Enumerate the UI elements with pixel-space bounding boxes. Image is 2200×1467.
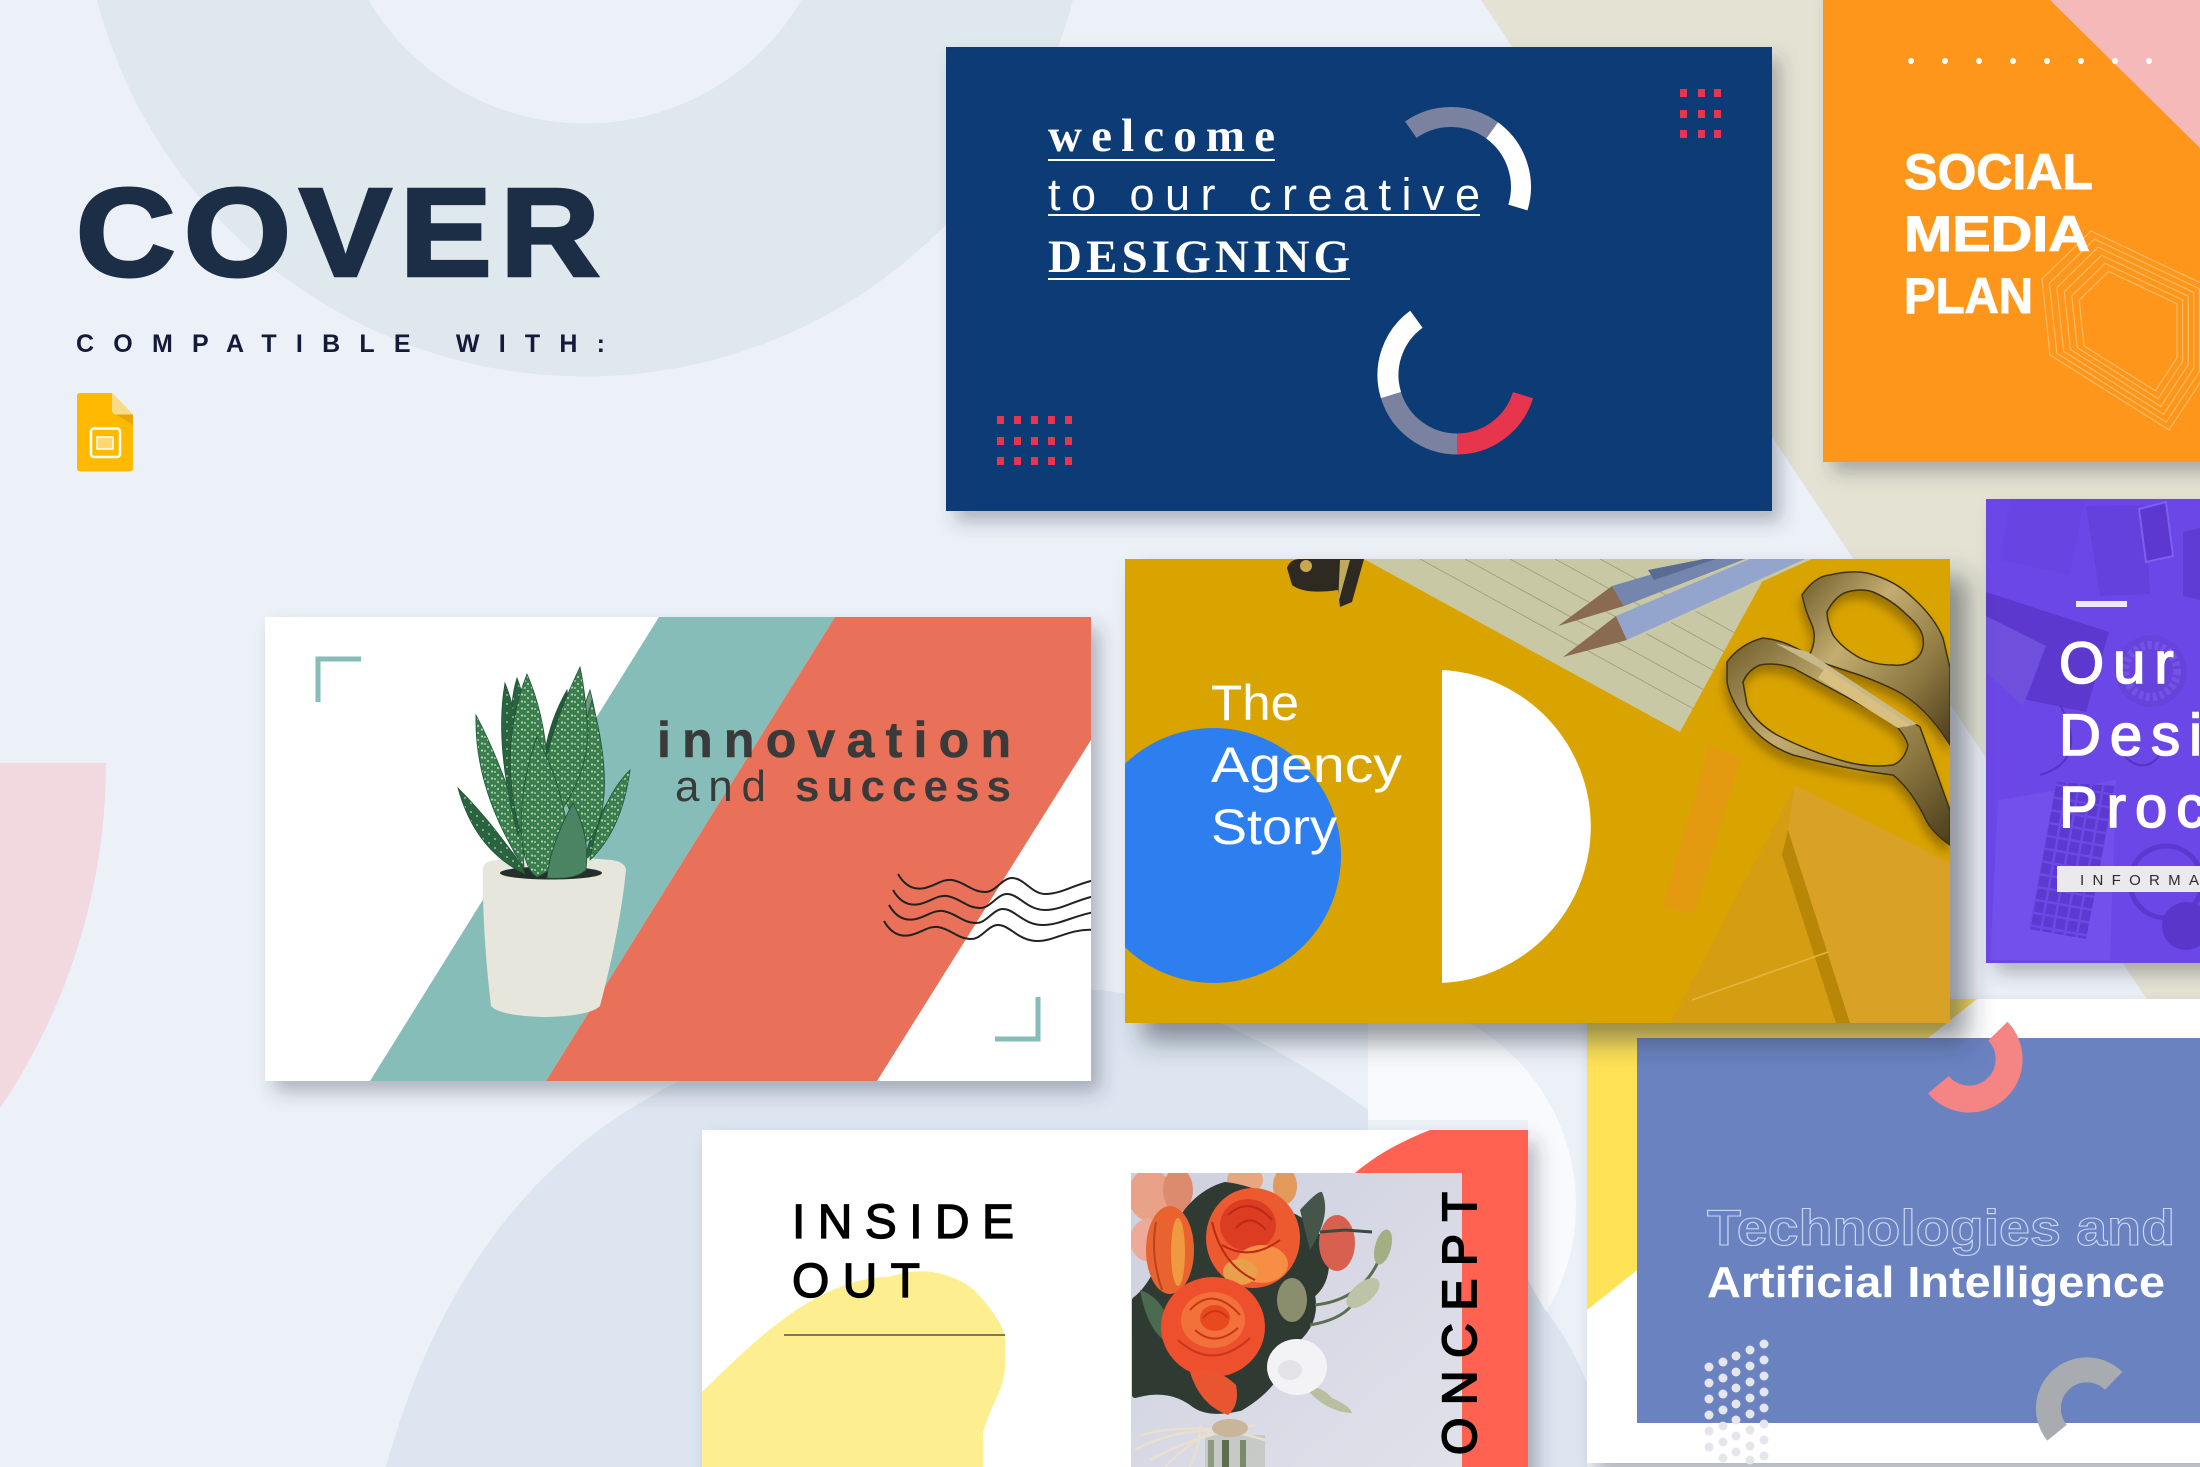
tulip right <box>1319 1215 1355 1271</box>
title: innovation and success: innovation <box>657 712 1011 768</box>
photo: lined paper <box>1364 559 1772 732</box>
nested hexagon lines <box>2042 231 2200 430</box>
lower petal <box>1190 1370 1237 1415</box>
heading: technologies and artificial intelligence: Technologies and <box>1707 1200 2175 1256</box>
corner bracket bottom right <box>995 997 1038 1039</box>
heading: social media plan <box>1904 144 2093 324</box>
grey arc <box>2048 1370 2114 1433</box>
ring: upper arc <box>1411 117 1521 208</box>
heading: the agency story: Agency <box>1211 737 1402 793</box>
heading: the agency story <box>1211 675 1402 855</box>
leaves <box>458 667 630 878</box>
title: innovation and success: success <box>795 762 1011 811</box>
rose lower <box>1161 1277 1265 1377</box>
photo: flower bouquet <box>1128 1166 1462 1467</box>
tulip left <box>1146 1206 1194 1294</box>
dot grid: top right <box>1680 89 1721 138</box>
white flower <box>1267 1339 1327 1395</box>
heading: inside out: INSIDE <box>792 1196 1014 1249</box>
heading: our design process <box>2060 641 2200 828</box>
dot pattern <box>1704 1340 1768 1464</box>
white half circle <box>1442 670 1591 983</box>
rose upper <box>1206 1188 1300 1288</box>
yellow corner <box>1587 999 1977 1310</box>
heading: social media plan: PLAN <box>1904 268 2033 324</box>
icon: google slides <box>77 393 133 472</box>
panel: innovation slide <box>265 617 1115 1081</box>
photo: envelope <box>1670 786 1836 1023</box>
pink corner <box>2050 0 2200 148</box>
background shape: pink quarter <box>0 763 106 1108</box>
background shape: white half circle <box>1368 997 1576 1467</box>
heading: technologies and artificial intelligence <box>1707 1200 2175 1307</box>
photo: scissors <box>1727 572 1950 845</box>
desk photo tones <box>1986 499 2200 960</box>
jar and twine <box>1135 1419 1265 1467</box>
heading: welcome to our creative designing <box>1048 110 1480 283</box>
accent bar <box>2076 601 2127 607</box>
corner bracket top left <box>318 659 361 702</box>
heading: welcome to our creative designing: to our creative <box>1048 169 1480 220</box>
photo: yellow stick <box>1663 746 1741 914</box>
subtitle: compatible with: COMPATIBLE WITH: <box>76 330 605 358</box>
dotted row <box>1908 58 2152 64</box>
blue circle <box>1125 728 1341 983</box>
background shape: lower blue corner <box>1528 1280 1587 1467</box>
title: innovation and success: and <box>675 762 766 811</box>
heading: welcome to our creative designing: welcome <box>1048 110 1275 162</box>
heading: inside out: OUT <box>792 1255 920 1308</box>
panel: inside out slide <box>702 1130 1528 1467</box>
heading: social media plan: SOCIAL <box>1904 144 2093 200</box>
heading: inside out <box>792 1196 1014 1308</box>
heading: the agency story: Story <box>1211 799 1337 855</box>
red strip below photo <box>1462 1173 1528 1467</box>
pot <box>483 858 626 1017</box>
divider line <box>784 1334 1005 1336</box>
heading: welcome to our creative designing: DESIGNING <box>1048 231 1350 283</box>
heading: our design process: Our <box>2059 631 2183 696</box>
dark foliage <box>1135 1185 1326 1411</box>
heading: the agency story: The <box>1211 675 1299 731</box>
photo: pencils <box>1558 559 1812 657</box>
title: cover: COVER <box>76 162 600 302</box>
background shape: beige wedge <box>1481 0 2200 1079</box>
yellow blob <box>702 1271 1006 1467</box>
panel: our design process slide <box>1986 499 2200 963</box>
heading: technologies and artificial intelligence: Artificial Intelligence <box>1707 1258 2165 1307</box>
blue field <box>1637 1038 2200 1423</box>
title: innovation and success <box>657 712 1011 811</box>
peach flowers top <box>1131 1173 1168 1220</box>
photo: binder clip <box>1287 559 1364 607</box>
background shape: blue arc <box>386 990 1368 1467</box>
pink arc <box>1938 1031 2009 1099</box>
background shape: pale ring <box>207 0 963 250</box>
label: information <box>2057 866 2200 892</box>
red corner shape <box>1355 1130 1528 1467</box>
ring: lower arc <box>1388 319 1523 444</box>
dot grid: bottom left <box>997 416 1072 465</box>
heading: social media plan: MEDIA <box>1904 206 2090 262</box>
panel: agency story slide <box>1086 559 2000 1023</box>
panel: welcome slide <box>946 47 1772 511</box>
stems and buds <box>1310 1262 1378 1325</box>
plant in concrete pot <box>458 667 630 1017</box>
wavy lines <box>884 874 1115 941</box>
panel: technologies and artificial intelligence slide <box>1587 999 2200 1464</box>
panel: social media plan slide <box>1823 0 2200 462</box>
